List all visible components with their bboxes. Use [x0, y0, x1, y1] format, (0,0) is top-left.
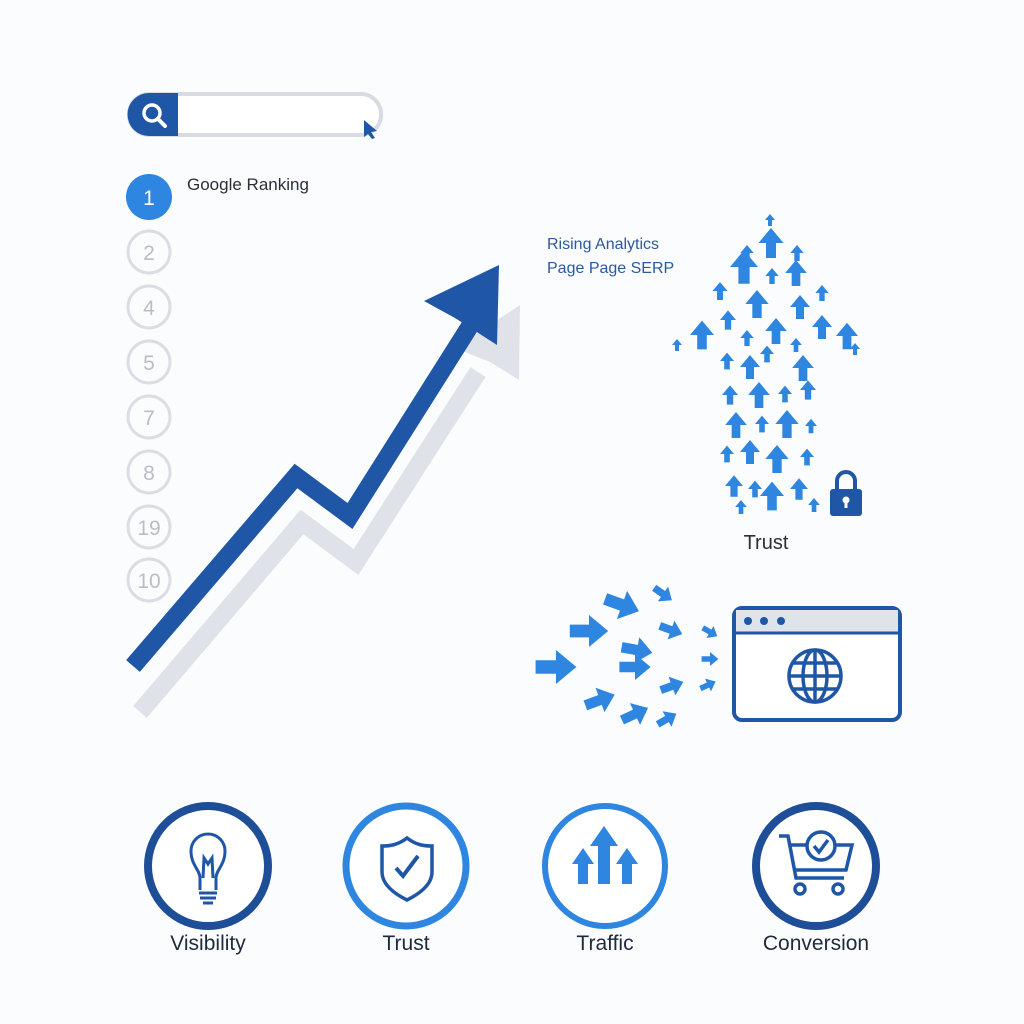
icon: trust shield	[346, 806, 466, 926]
ranking list: 5	[143, 352, 155, 375]
ranking list: 8	[143, 462, 155, 485]
bottom labels: Traffic	[576, 932, 634, 955]
ranking list	[126, 174, 172, 601]
bottom labels	[170, 932, 869, 955]
bottom labels: Visibility	[170, 932, 246, 955]
ranking list: 4	[143, 297, 155, 320]
icon: conversion cart	[756, 806, 876, 926]
label: rising analytics: Rising Analytics	[547, 236, 659, 253]
search bar	[128, 93, 381, 139]
bottom labels: Trust	[382, 932, 430, 955]
icon: traffic	[545, 806, 665, 926]
ranking list: 1	[143, 187, 155, 210]
bottom labels: Conversion	[763, 932, 869, 955]
traffic arrows flowing	[536, 580, 721, 732]
icon: visibility	[148, 806, 268, 926]
browser window	[734, 608, 900, 720]
label: Google Ranking: Google Ranking	[187, 175, 309, 194]
label: rising analytics: Page Page SERP	[547, 260, 674, 277]
ranking list: 19	[137, 517, 161, 540]
ranking list: 10	[137, 570, 161, 593]
big arrow made of small arrows	[672, 214, 860, 514]
trend arrow shadow	[140, 305, 520, 712]
ranking list: 2	[143, 242, 155, 265]
trend arrow main	[133, 265, 499, 666]
icon: lock	[830, 472, 862, 516]
label: rising analytics	[547, 236, 674, 277]
ranking list: 7	[143, 407, 155, 430]
label: Trust: Trust	[744, 532, 789, 554]
